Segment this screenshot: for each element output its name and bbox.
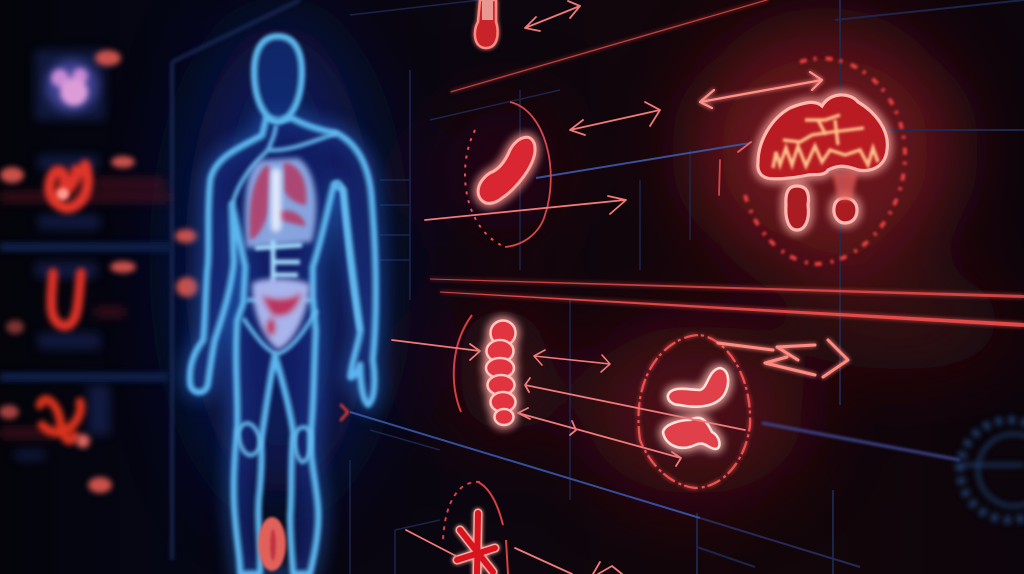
- icon: bottom star organ: [443, 482, 508, 574]
- icon: brain badge: [745, 58, 905, 264]
- ambient glows: [185, 20, 1010, 500]
- icon: U-shaped organ: [51, 273, 81, 326]
- lungs: [250, 162, 306, 240]
- arrow: brain pointer: [738, 142, 751, 152]
- left dim panel: organ icons: [0, 50, 198, 493]
- arrow: to brain double: [700, 72, 822, 108]
- sternum highlight: [271, 168, 281, 232]
- arrow: bottom line: [406, 530, 622, 574]
- pelvis organ: [252, 279, 310, 350]
- blue crossing lines: [350, 143, 960, 567]
- human figure: [190, 36, 376, 574]
- arrow: lower double: [534, 350, 610, 372]
- arrow: upper middle double: [570, 102, 660, 135]
- icon: swirl organ: [49, 165, 88, 208]
- horizontal dim bands: [0, 247, 170, 377]
- body glow: [190, 118, 376, 574]
- icon: flower core: [51, 68, 88, 106]
- body outline: [190, 118, 376, 574]
- arrow: thin vertical: [719, 160, 720, 195]
- icon: double organ badge: [638, 335, 750, 488]
- icon: segmented colon: [486, 320, 516, 425]
- long red lines: [430, 0, 1024, 327]
- blue panel patches: [15, 50, 110, 460]
- inner contours: [232, 125, 360, 462]
- icon: swirl highlight: [57, 188, 69, 200]
- arrow: colon to right: [425, 196, 626, 220]
- chest organ zone: [245, 158, 316, 248]
- small red markers: [0, 50, 198, 493]
- abdomen ribs: [255, 240, 302, 285]
- lower leg red organ: [258, 517, 286, 571]
- icon: loop knob: [76, 434, 90, 448]
- icon: round colon badge: [465, 102, 551, 247]
- arrow: lower crossing: [518, 408, 681, 466]
- arrow: zigzag right: [718, 340, 848, 377]
- arrows: [341, 1, 848, 574]
- brain stem glow: [832, 172, 858, 200]
- brain scribbles: [773, 115, 878, 168]
- icon: top capsule: [475, 0, 498, 48]
- arrow: top double: [525, 1, 580, 31]
- head: [254, 36, 302, 122]
- icon: looped organ: [40, 400, 81, 441]
- icon: flower organ: [46, 60, 98, 112]
- arrow: incoming colon: [392, 340, 480, 360]
- bracket near colon: [454, 315, 472, 412]
- icon: faint blue gear: [955, 420, 1024, 520]
- arrow: small chevron: [341, 405, 348, 420]
- arrow: long crossing: [525, 378, 745, 430]
